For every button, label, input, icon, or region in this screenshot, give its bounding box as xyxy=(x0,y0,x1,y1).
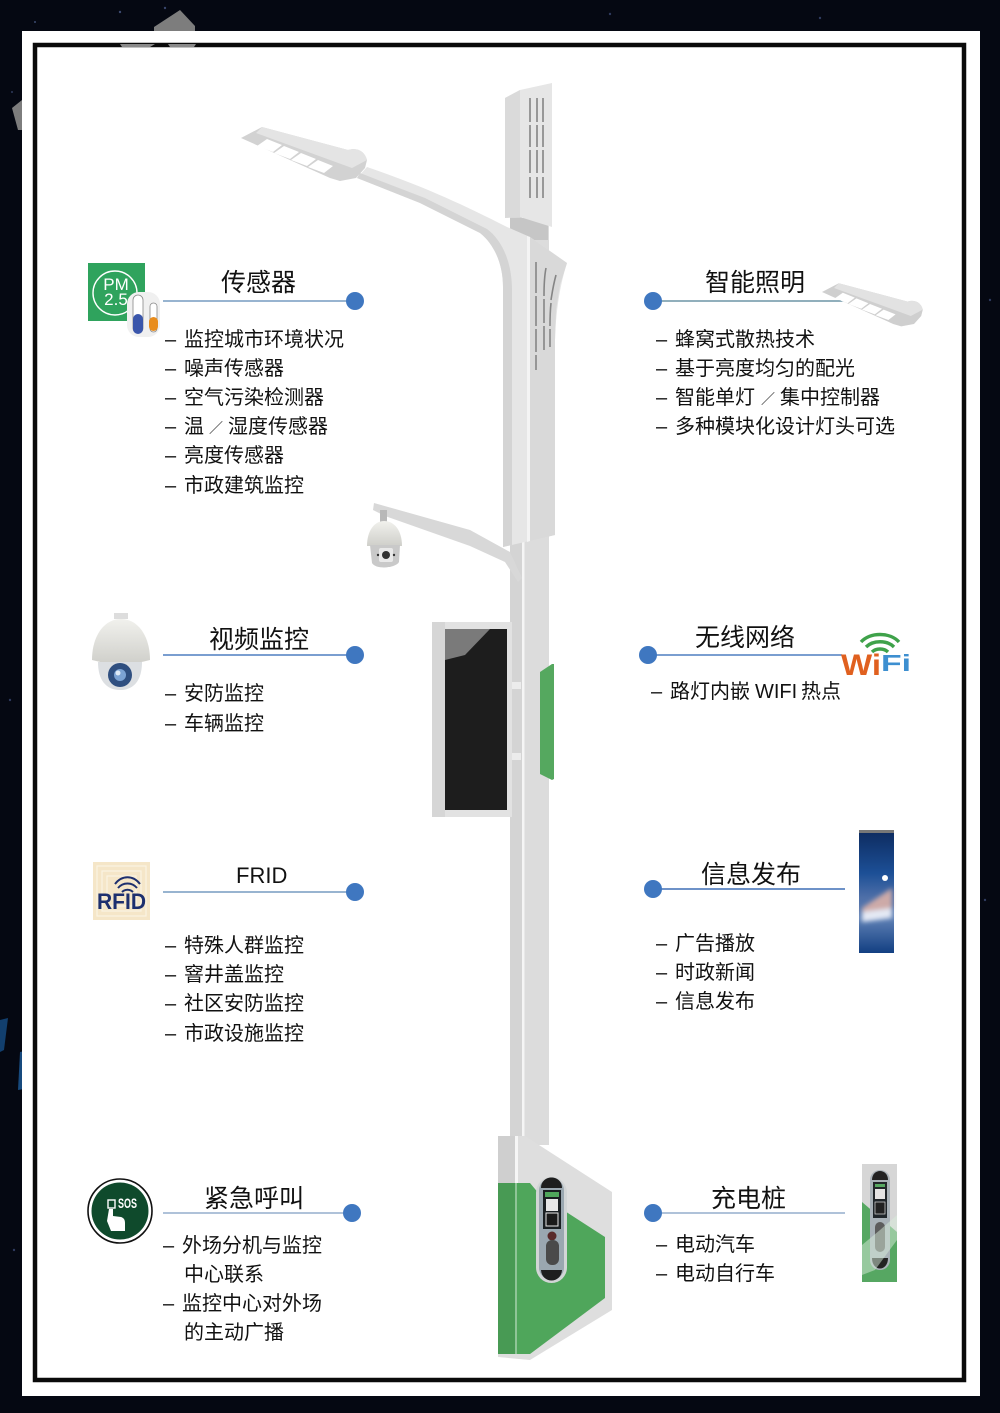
text list: 中心联系 xyxy=(184,1263,264,1286)
text list: 市政建筑监控 xyxy=(184,474,304,497)
text list: – xyxy=(165,475,177,497)
text list xyxy=(165,934,304,1045)
icon: SOS button xyxy=(88,1179,152,1243)
panel: wireless network xyxy=(639,624,911,703)
connector dot and line xyxy=(163,1204,361,1222)
text list: 广告播放 xyxy=(675,932,755,955)
text list: – xyxy=(165,683,177,705)
heading: 智能照明 xyxy=(705,269,805,297)
text list: 噪声传感器 xyxy=(184,357,284,380)
panel: RFID xyxy=(93,862,364,1045)
text list: 特殊人群监控 xyxy=(184,934,304,957)
text list: 智能单灯 xyxy=(675,386,755,409)
heading: 紧急呼叫 xyxy=(204,1185,304,1213)
icon: RFID xyxy=(93,862,150,920)
heading: 充电桩 xyxy=(711,1185,786,1213)
connector dot and line xyxy=(163,292,364,310)
connector dot and line xyxy=(644,880,845,898)
text list: 蜂窝式散热技术 xyxy=(675,328,815,351)
icon: PM2.5 and thermometers: 2.5 xyxy=(104,290,128,309)
panel: sensors xyxy=(88,263,364,497)
connector dot and line xyxy=(163,646,364,664)
text list: – xyxy=(656,387,668,409)
icon: WiFi logo: Wi xyxy=(841,649,881,682)
text list: 空气污染检测器 xyxy=(184,386,324,409)
heading: 无线网络 xyxy=(695,624,795,652)
heading: 传感器 xyxy=(221,269,296,297)
top vented module xyxy=(505,83,552,227)
text list: 湿度传感器 xyxy=(228,415,328,438)
text list xyxy=(656,932,755,1013)
icon: dome camera xyxy=(92,613,150,690)
text list: 集中控制器 xyxy=(780,386,880,409)
text list: 市政设施监控 xyxy=(184,1022,304,1045)
pole shaft xyxy=(510,215,549,1145)
panel: emergency call xyxy=(88,1179,361,1344)
icon: WiFi logo xyxy=(841,634,911,682)
connector dot and line xyxy=(639,646,842,664)
illustration: smart street pole xyxy=(241,83,612,1360)
heading: 信息发布 xyxy=(701,861,801,889)
text list: 窨井盖监控 xyxy=(184,963,284,986)
text list: – xyxy=(656,991,668,1013)
text list: 车辆监控 xyxy=(184,712,264,735)
icon: RFID: RFID xyxy=(97,889,146,914)
text list: – xyxy=(656,1263,668,1285)
text list: 信息发布 xyxy=(675,990,755,1013)
LED information screen xyxy=(432,622,521,817)
text list: 多种模块化设计灯头可选 xyxy=(675,415,895,438)
text list: – xyxy=(656,962,668,984)
text list: ／ xyxy=(209,420,223,436)
text list: 监控城市环境状况 xyxy=(184,328,344,351)
charging base xyxy=(498,1136,612,1360)
heading: 视频监控 xyxy=(209,626,309,654)
text list: 电动汽车 xyxy=(675,1233,755,1256)
text list: – xyxy=(165,993,177,1015)
text list: – xyxy=(165,964,177,986)
text list: 安防监控 xyxy=(184,682,264,705)
text list: – xyxy=(651,681,663,703)
icon: PM2.5 and thermometers xyxy=(88,263,160,337)
text list xyxy=(165,682,264,735)
text list: – xyxy=(656,329,668,351)
charging unit xyxy=(536,1177,567,1283)
text list: 基于亮度均匀的配光 xyxy=(675,357,855,380)
text list: – xyxy=(165,713,177,735)
text list: – xyxy=(163,1235,175,1257)
text list: 时政新闻 xyxy=(675,961,755,984)
green side panel xyxy=(540,664,554,780)
text list: – xyxy=(656,1234,668,1256)
panel: information release xyxy=(644,830,894,1013)
text list: 温 xyxy=(184,415,204,438)
text list xyxy=(651,680,841,703)
text list xyxy=(656,1233,775,1285)
text list: – xyxy=(165,358,177,380)
text list: – xyxy=(656,933,668,955)
text list: 外场分机与监控 xyxy=(182,1234,322,1257)
text list: 电动自行车 xyxy=(675,1262,775,1285)
text list: 亮度传感器 xyxy=(184,444,284,467)
text list: – xyxy=(165,445,177,467)
text list xyxy=(163,1234,322,1344)
icon: charger xyxy=(862,1164,897,1282)
connector dot and line xyxy=(163,883,364,901)
text list xyxy=(656,328,895,438)
text list: – xyxy=(656,416,668,438)
text list: 路灯内嵌 xyxy=(670,680,750,703)
text list xyxy=(165,328,344,497)
icon: galaxy poster xyxy=(859,830,894,953)
camera arm xyxy=(373,503,522,582)
text list: 的主动广播 xyxy=(184,1321,284,1344)
text list: WIFI xyxy=(755,681,797,703)
text list: – xyxy=(165,935,177,957)
connector dot and line xyxy=(644,1204,845,1222)
panel: smart lighting xyxy=(644,269,923,438)
text list: 社区安防监控 xyxy=(184,992,304,1015)
icon: lamp head xyxy=(822,283,923,326)
text list: 监控中心对外场 xyxy=(182,1292,322,1315)
text list: 热点 xyxy=(801,680,841,703)
panel: charging pile xyxy=(644,1164,897,1285)
connector dot and line xyxy=(644,292,845,310)
text list: – xyxy=(165,387,177,409)
heading: FRID xyxy=(236,863,287,888)
text list: ／ xyxy=(761,391,775,407)
text list: – xyxy=(165,416,177,438)
street lamp head xyxy=(241,127,367,181)
text list: – xyxy=(165,1023,177,1045)
text list: – xyxy=(656,358,668,380)
icon: PM2.5 and thermometers: PM xyxy=(103,275,129,294)
street light arm and housing xyxy=(357,167,567,547)
text list: – xyxy=(165,329,177,351)
text list: – xyxy=(163,1293,175,1315)
icon: SOS button: SOS xyxy=(118,1195,137,1211)
dome camera on pole xyxy=(367,510,402,567)
panel: video surveillance xyxy=(92,613,364,735)
icon: WiFi logo: Fi xyxy=(881,650,911,676)
